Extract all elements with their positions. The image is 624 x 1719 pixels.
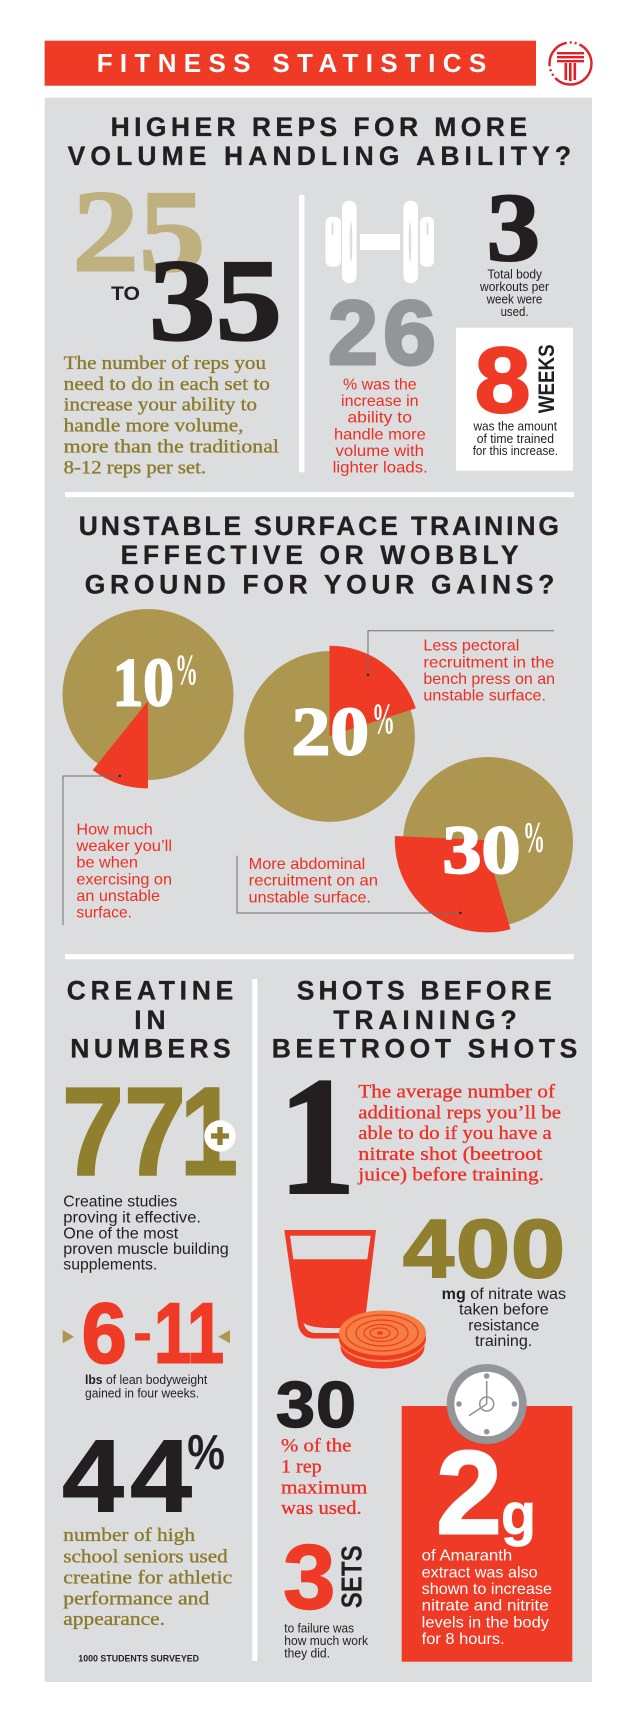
stat: 6 to 11: 6 [82, 1286, 127, 1382]
text: high school seniors: creatine for athletic [63, 1568, 232, 1588]
text: percent increase: volume with [336, 443, 424, 460]
text: additional reps: nitrate shot (beetroot [358, 1145, 543, 1165]
heading: unstable surface [79, 511, 559, 599]
stat: 3 sets [283, 1526, 369, 1628]
heading: shots before training: SHOTS BEFORE [297, 975, 552, 1005]
text: workouts per week: used. [501, 305, 528, 319]
stat: 25: 25 [72, 168, 205, 296]
heading: unstable surface: GROUND FOR YOUR GAINS? [85, 569, 554, 599]
text: workouts per week: week were [486, 292, 542, 306]
text: abdominal recruitment [249, 856, 378, 906]
stat: 400 mg [403, 1202, 565, 1295]
icon: T logo [550, 42, 592, 84]
stat: 6 to 11: - [133, 1280, 152, 1376]
text: mg of nitrate: taken before [459, 1302, 549, 1319]
stat: 3 sets: SETS [337, 1545, 369, 1608]
text: pectoral recruitment: Less pectoral [423, 638, 519, 655]
panel: 8 weeks: was the amount [473, 420, 557, 434]
panel: 2g amaranth: nitrate and nitrite [422, 1598, 549, 1615]
text: pectoral recruitment: unstable surface. [423, 688, 546, 705]
panel: 2g amaranth: for 8 hours. [422, 1631, 505, 1648]
panel: 8 weeks: of time trained [477, 432, 554, 446]
stat: 771 plus: 1 [180, 1062, 238, 1202]
stat: 6 to 11: 1 [154, 1286, 191, 1382]
stat: 3 sets: 3 [283, 1526, 336, 1628]
stat: 35: 35 [149, 236, 282, 366]
text: number of reps: increase your ability to [64, 396, 257, 416]
stat label: to: TO [111, 283, 140, 305]
text: to failure: to failure was [284, 1621, 354, 1636]
text: to failure: they did. [284, 1645, 330, 1660]
text: pectoral recruitment: bench press on an [423, 671, 555, 688]
stat: 400 mg: 0 [511, 1202, 565, 1295]
panel: 2g amaranth: g [501, 1482, 536, 1547]
stat: 30 percent: 3 [276, 1368, 315, 1441]
text: creatine studies: Creatine studies [63, 1194, 178, 1211]
panel: 2g amaranth: shown to increase [422, 1581, 552, 1598]
heading: shots before training: TRAINING? [333, 1005, 517, 1035]
heading: shots before training: BEETROOT SHOTS [272, 1034, 577, 1064]
pie chart: 10 percent: 10 [113, 644, 174, 720]
text: creatine studies: One of the most [63, 1225, 179, 1242]
stat: 3 workouts: 3 [487, 174, 540, 282]
callout line: 10 percent [63, 775, 121, 925]
text: lbs of lean bodyweight: gained in four weeks. [85, 1385, 199, 1400]
stat: 44 percent [62, 1419, 225, 1534]
pie chart: 20 percent [244, 646, 416, 822]
icon: dumbbell [326, 201, 434, 283]
icon: juice glass [284, 1230, 376, 1338]
text: additional reps: juice) before training. [357, 1166, 544, 1186]
text: percent increase [333, 376, 428, 477]
section: creatine [62, 975, 238, 1665]
text: number of reps: need to do in each set to [64, 375, 270, 395]
stat: 6 to 11: 1 [187, 1286, 224, 1382]
text: additional reps [357, 1082, 561, 1186]
panel: 8 weeks: 8 [475, 328, 531, 432]
text: weaker: surface. [76, 905, 132, 922]
heading: higher reps [68, 112, 571, 171]
panel: 2g amaranth: of Amaranth [422, 1548, 512, 1565]
text: mg of nitrate [442, 1286, 566, 1350]
text: 1 rep maximum: 1 rep [281, 1457, 322, 1477]
stat: 26: 6 [383, 283, 436, 384]
stat: 26 [328, 283, 436, 384]
callout line: 20 percent [367, 631, 554, 676]
panel: 2g amaranth: 2 [436, 1426, 502, 1560]
panel: 2g amaranth: levels in the body [422, 1614, 549, 1631]
title banner: FITNESS STATISTICS [97, 48, 486, 78]
text: weaker: be when [76, 855, 138, 872]
text: pectoral recruitment: recruitment in the [423, 654, 554, 671]
heading: creatine in numbers: CREATINE [67, 975, 233, 1005]
stat: 44 percent: 4 [130, 1419, 192, 1534]
pie chart: 10 percent [62, 609, 234, 788]
text: 1 rep maximum: was used. [281, 1499, 362, 1519]
stat: 26: 2 [328, 283, 378, 384]
stat: 6 to 11 [63, 1280, 230, 1382]
text: creatine studies: proven muscle building [63, 1241, 229, 1258]
panel: 2g amaranth: extract was also [422, 1564, 538, 1581]
text: workouts per week: workouts per [479, 280, 549, 294]
text: mg of nitrate: mg of nitrate was [442, 1286, 566, 1303]
text: lbs of lean bodyweight: lbs of lean bodyweight [85, 1372, 208, 1387]
text: weaker: exercising on [76, 871, 172, 888]
stat: 771 plus [62, 1062, 238, 1202]
text: abdominal recruitment: unstable surface. [249, 889, 371, 906]
text: high school seniors [63, 1526, 232, 1630]
text: to failure [284, 1621, 368, 1660]
stat: 30 percent: 0 [316, 1368, 356, 1441]
text: creatine studies: proving it effective. [63, 1209, 201, 1226]
heading: unstable surface: UNSTABLE SURFACE TRAINING [79, 511, 559, 541]
text: additional reps: The average number of [358, 1082, 556, 1102]
heading: shots before training [272, 975, 577, 1064]
heading: creatine in numbers [67, 975, 233, 1064]
title banner [45, 41, 536, 86]
panel: 8 weeks: WEEKS [534, 344, 559, 413]
stat: 44 percent: % [187, 1426, 225, 1480]
pie chart: 30 percent: 30 [442, 812, 520, 888]
pie chart: 30 percent [395, 757, 573, 932]
pie chart: 20 percent: % [372, 696, 395, 743]
note: students surveyed: 1000 STUDENTS SURVEYED [78, 1654, 199, 1665]
text: number of reps: more than the traditional [64, 437, 279, 457]
text: number of reps: The number of reps you [64, 354, 266, 374]
text: additional reps: additional reps you’ll be [358, 1103, 561, 1123]
text: percent increase: handle more [334, 426, 426, 443]
text: number of reps [64, 354, 279, 478]
text: workouts per week [479, 267, 549, 319]
panel: 8 weeks [456, 328, 573, 471]
text: number of reps: handle more volume, [64, 417, 244, 437]
text: high school seniors: school seniors used [63, 1547, 229, 1567]
stat: 400 mg: 4 [403, 1202, 454, 1295]
text: weaker: weaker you’ll [75, 838, 172, 855]
panel: 2g amaranth [402, 1364, 572, 1662]
text: number of reps: 8-12 reps per set. [64, 458, 206, 478]
text: creatine studies: supplements. [63, 1256, 157, 1273]
text: high school seniors: performance and [63, 1589, 210, 1609]
stat: 44 percent: 4 [62, 1419, 124, 1534]
icon: clock [447, 1364, 527, 1444]
heading: unstable surface: EFFECTIVE OR WOBBLY [121, 540, 519, 570]
text: abdominal recruitment: recruitment on an [249, 873, 378, 890]
pie chart: 20 percent: 20 [292, 694, 369, 770]
text: weaker [75, 821, 172, 922]
text: weaker: How much [76, 821, 153, 838]
text: high school seniors: appearance. [63, 1610, 165, 1630]
text: mg of nitrate: resistance [468, 1317, 539, 1334]
section: unstable surface [62, 511, 573, 932]
text: percent increase: % was the [343, 376, 417, 393]
text: percent increase: lighter loads. [333, 460, 428, 477]
text: to failure: how much work [284, 1633, 368, 1648]
text: pectoral recruitment [423, 638, 555, 705]
heading: higher reps: HIGHER REPS FOR MORE [111, 112, 527, 142]
panel: 8 weeks: for this increase. [473, 444, 558, 458]
stat: 771 plus: 7 [124, 1062, 186, 1202]
heading: higher reps: VOLUME HANDLING ABILITY? [68, 141, 571, 171]
text: mg of nitrate: training. [475, 1333, 532, 1350]
section: beetroot shots [272, 975, 577, 1662]
text: percent increase: increase in [341, 393, 419, 410]
text: lbs of lean bodyweight [85, 1372, 208, 1400]
text: 1 rep maximum: maximum [281, 1478, 368, 1498]
section: higher reps [64, 112, 573, 478]
text: high school seniors: number of high [63, 1526, 195, 1546]
text: workouts per week: Total body [488, 267, 543, 281]
text: abdominal recruitment: More abdominal [249, 856, 365, 873]
stat: 400 mg: 0 [456, 1202, 510, 1295]
text: percent increase: ability to [347, 410, 412, 427]
heading: creatine in numbers: IN [134, 1005, 166, 1035]
text: additional reps: able to do if you have a [358, 1124, 552, 1144]
stat: 1 rep: 1 [278, 1042, 356, 1230]
text: weaker: an unstable [76, 888, 160, 905]
pie chart: 10 percent: % [175, 647, 198, 694]
text: creatine studies [63, 1194, 229, 1273]
callout line: 30 percent [237, 856, 462, 914]
icon: beetroot slices [339, 1310, 426, 1368]
stat: 30 percent [276, 1368, 356, 1441]
text: 1 rep maximum: % of the [281, 1437, 351, 1457]
stat: 771 plus: 7 [62, 1062, 124, 1202]
text: 1 rep maximum [281, 1437, 368, 1519]
heading: creatine in numbers: NUMBERS [70, 1034, 231, 1064]
pie chart: 30 percent: % [523, 814, 545, 862]
